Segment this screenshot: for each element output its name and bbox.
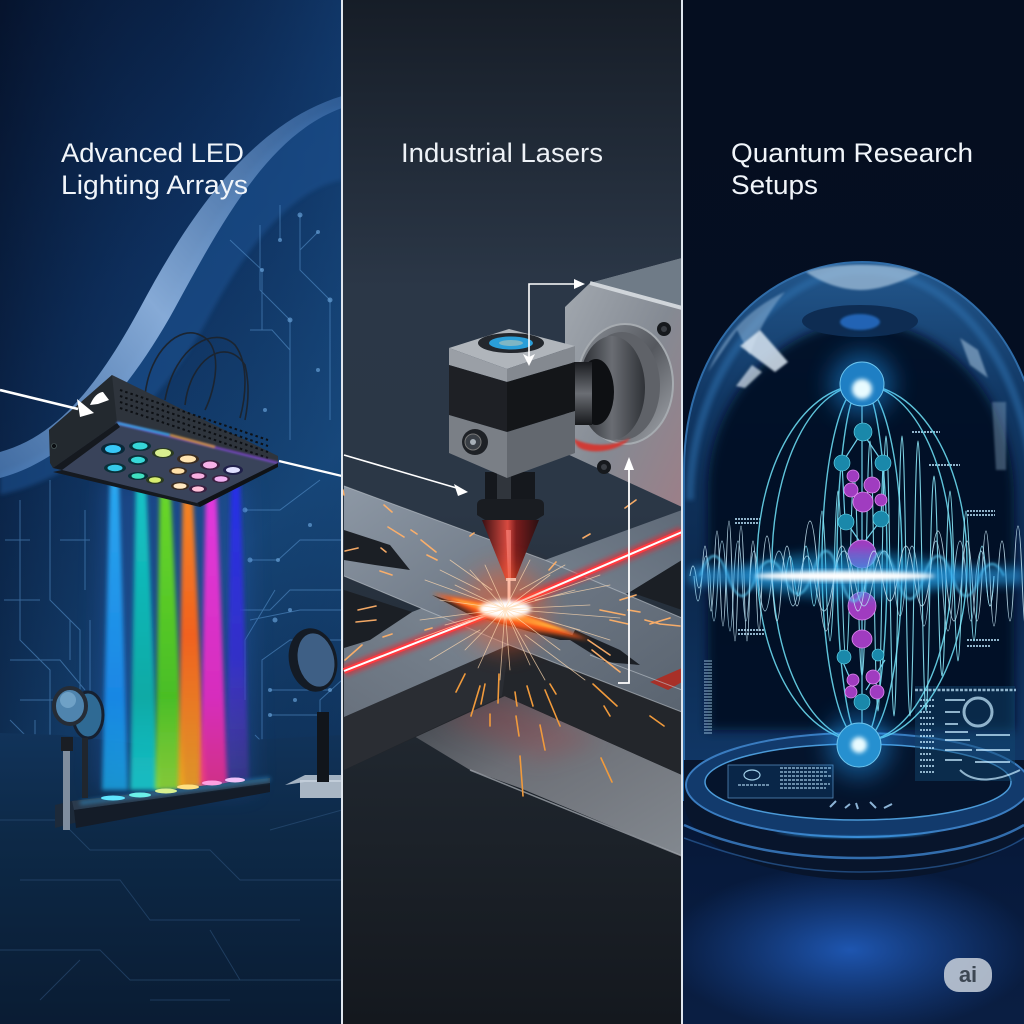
icon: LED fixture: [49, 375, 278, 507]
heading: industrial lasers: Industrial Lasers: [401, 138, 603, 168]
slots in beams: [344, 530, 682, 665]
oscillating vertical waveform: [786, 436, 994, 716]
heading: quantum research setups: Quantum Research: [731, 138, 973, 168]
bottom sphere: [827, 713, 891, 777]
glass dome: [684, 262, 1024, 800]
icon: left lens on stand: [54, 688, 103, 830]
heading: quantum research setups: [731, 138, 973, 200]
purple nodes: [844, 470, 887, 699]
arrow: lower riser: [618, 457, 634, 683]
laser beam crossing: [344, 532, 682, 671]
sweep highlight band: [0, 96, 342, 478]
waveform glow: [740, 551, 960, 599]
atom orbit ellipses: [757, 385, 967, 741]
circuit board pattern: [4, 205, 342, 770]
dome inner dark: [708, 322, 1014, 730]
horizontal quantum waveform: [688, 521, 1024, 641]
sparks: [343, 490, 680, 796]
molten cut glow: [432, 567, 590, 651]
panel: quantum research setups: [665, 0, 1024, 1024]
camera lens: [462, 429, 488, 455]
floor glow: [665, 865, 1024, 1024]
dome base highlight: [775, 832, 940, 838]
icon: receiver bar: [55, 778, 270, 828]
icon: right mirror on stand: [283, 624, 343, 798]
badge: ai: [944, 958, 992, 992]
dark base beam: [505, 696, 681, 858]
base readout panel: [728, 765, 833, 798]
arrow: elbow connector: [523, 279, 585, 366]
badge: ai: ai: [959, 962, 977, 987]
nozzle: [477, 472, 544, 581]
base platform: [684, 733, 1024, 880]
lower steel bar: [409, 695, 682, 856]
underside of beams: [415, 646, 681, 774]
color light beams: [98, 480, 252, 790]
holographic data panels: [708, 432, 1020, 781]
central node column: [827, 352, 894, 777]
icon: cables above LED fixture: [145, 333, 248, 420]
heading: advanced LED lighting arrays: Lighting Arrays: [61, 170, 248, 200]
LEDs: [101, 441, 243, 493]
connectors: [842, 384, 885, 745]
arrow: head pointer: [344, 455, 468, 496]
heading: advanced LED lighting arrays: [61, 138, 248, 200]
beam ambient glow: [98, 480, 252, 790]
glass reflections: [806, 265, 920, 290]
laser head cube: [449, 329, 575, 478]
indicator ring: [478, 333, 544, 353]
floor: [0, 733, 342, 1024]
teal nodes: [834, 423, 891, 710]
steel beam: lower-left to upper-right: [344, 510, 682, 717]
panel: advanced LED lighting arrays: [0, 0, 343, 1024]
dome top lamp: [802, 305, 918, 337]
arrow: LED fixture pointer: [0, 390, 109, 417]
arrow segment: to laser panel: [279, 461, 342, 476]
steel beam: upper-left to lower-right: [344, 486, 682, 712]
mounting screws: [657, 322, 671, 336]
fixture left side: [49, 375, 117, 468]
circuit nodes: [242, 212, 332, 717]
top sphere: [830, 352, 894, 416]
fixture underside: [53, 423, 278, 503]
heading: advanced LED lighting arrays: Advanced LED: [61, 138, 244, 168]
background sweep curve: [0, 105, 342, 495]
panel: industrial lasers: [342, 0, 682, 1024]
panel dividers: [341, 0, 683, 1024]
fixture side with vents: [49, 375, 278, 503]
heading: quantum research setups: Setups: [731, 170, 818, 200]
floor circuit lines: [0, 810, 342, 1000]
machine block: [565, 258, 682, 507]
lens housing: [577, 324, 673, 444]
